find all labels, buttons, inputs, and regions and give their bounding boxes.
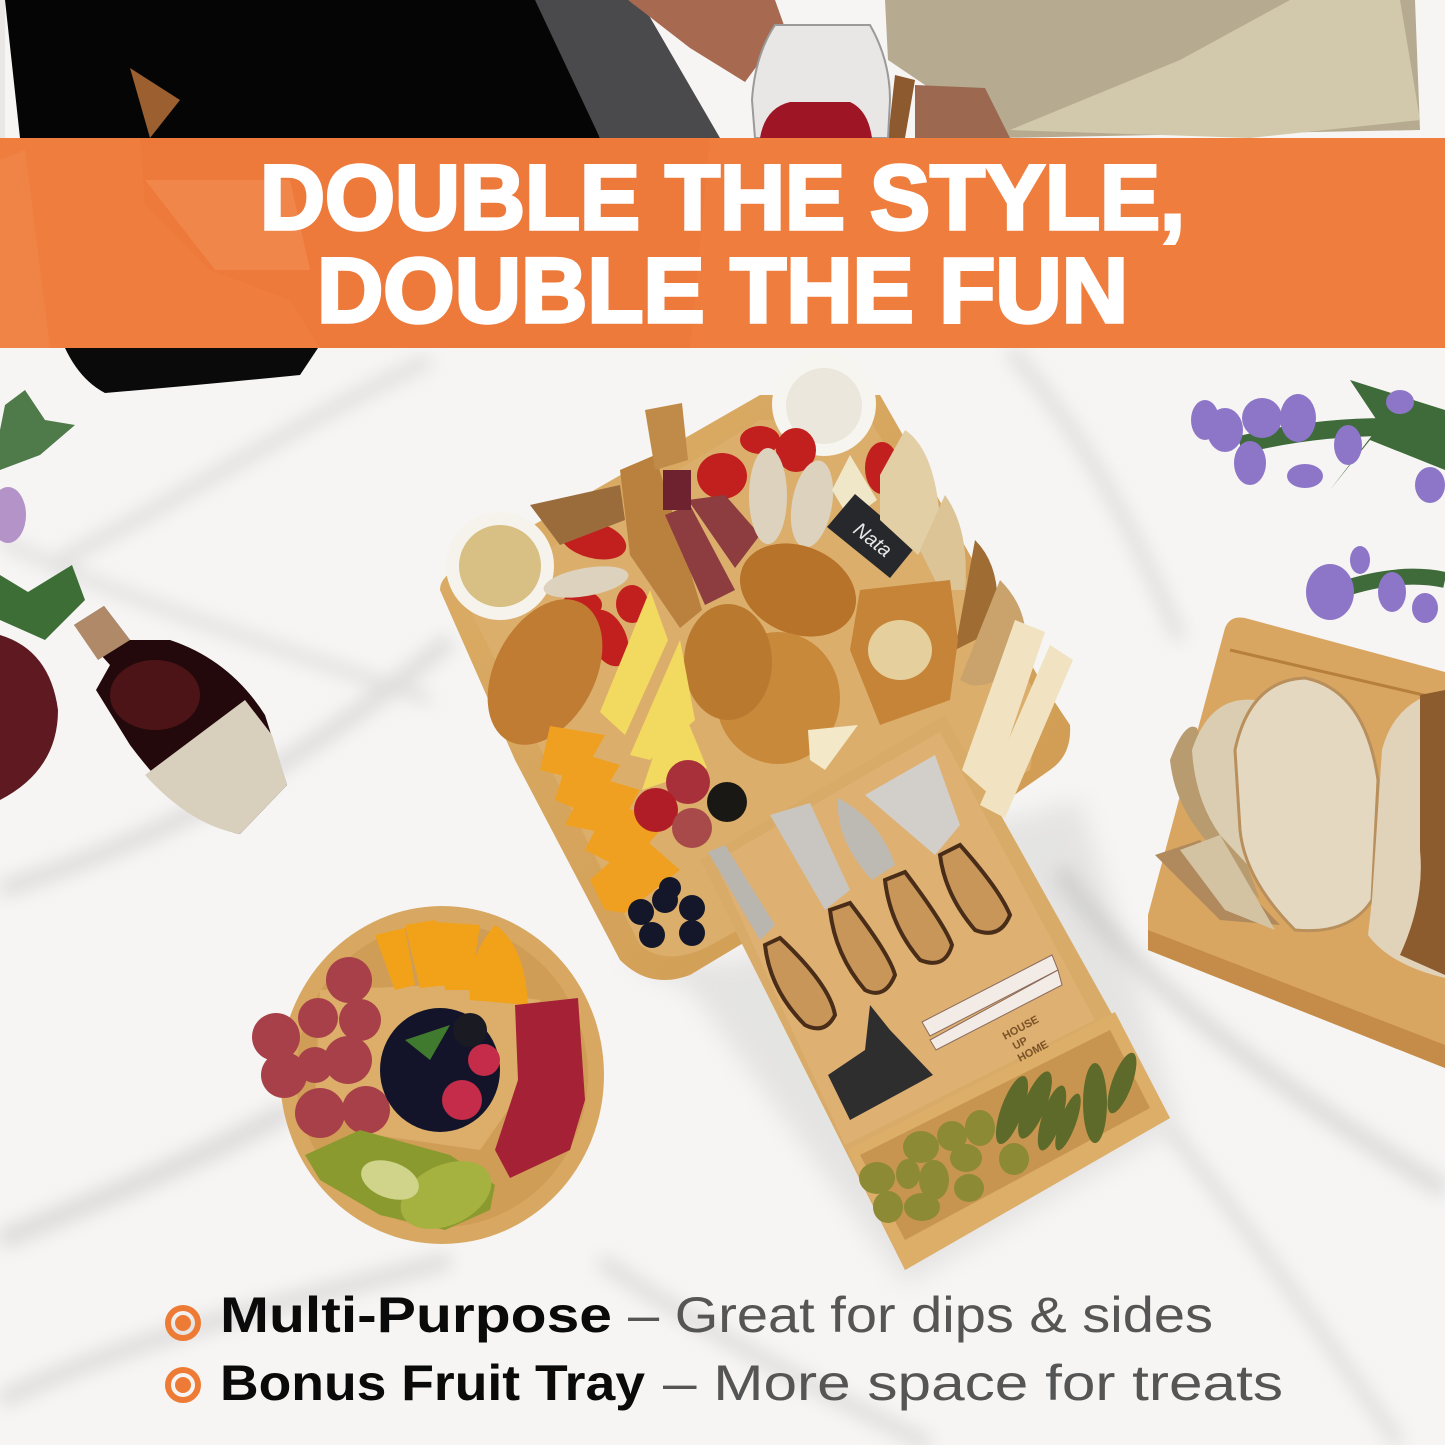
wine bottle: [74, 606, 287, 834]
logo: HOME: [1016, 1039, 1051, 1065]
cheese knives: [708, 755, 1010, 1028]
bread slices: [880, 430, 1026, 686]
breadsticks: [620, 455, 702, 628]
drawer: [700, 715, 1170, 1270]
bread board: [1148, 617, 1445, 1068]
logo: UP: [1011, 1035, 1030, 1053]
berry bowl: [380, 1008, 500, 1132]
dragon fruit: [495, 998, 585, 1178]
sliced bread: [1155, 678, 1445, 978]
dark sleeve under banner: [65, 348, 318, 393]
feature bullets: [168, 1287, 1283, 1411]
logo: [1001, 1014, 1051, 1065]
white cheese sticks: [962, 620, 1073, 818]
kiwi: [305, 1130, 502, 1242]
bullet: multi-purpose: Multi-Purpose: [220, 1287, 612, 1343]
title: DOUBLE THE FUN: [317, 240, 1128, 342]
bullet: multi-purpose: – Great for dips & sides: [628, 1287, 1213, 1343]
orange banner: [0, 138, 1445, 348]
left flowers: [0, 390, 85, 640]
title: DOUBLE THE STYLE,: [260, 147, 1185, 249]
sausages: [541, 448, 877, 603]
slate and chalk: [828, 955, 1062, 1120]
logo: HOUSE: [1001, 1014, 1041, 1043]
salami: [663, 470, 760, 605]
orange slices: [375, 920, 528, 1005]
board shadow: [620, 800, 1180, 1285]
people at the table: [0, 0, 1420, 138]
olives and gherkins: [859, 1050, 1142, 1223]
cheese: [600, 590, 858, 790]
nuts: [530, 485, 625, 545]
grapes and berries: [628, 760, 747, 948]
bullet: bonus fruit tray: [168, 1355, 1283, 1411]
wine glass: [752, 25, 890, 138]
citrus: [540, 726, 680, 913]
slate tag: [827, 494, 916, 578]
slate tag: Nata: [849, 519, 896, 562]
main bamboo board: [440, 352, 1170, 1270]
bullet: bonus fruit tray: Bonus Fruit Tray: [220, 1355, 645, 1411]
strawberries and peppers: [555, 426, 899, 673]
vase: [0, 635, 58, 800]
bullet: multi-purpose: [168, 1287, 1213, 1343]
grapes: [252, 957, 390, 1138]
right flowers: [1191, 380, 1445, 623]
dip bowls: [446, 352, 876, 620]
bullet: bonus fruit tray: – More space for treats: [663, 1355, 1283, 1411]
charcuterie food: [446, 352, 1073, 948]
round fruit tray: [252, 906, 604, 1244]
title: [260, 147, 1185, 342]
pastries: [464, 527, 958, 764]
